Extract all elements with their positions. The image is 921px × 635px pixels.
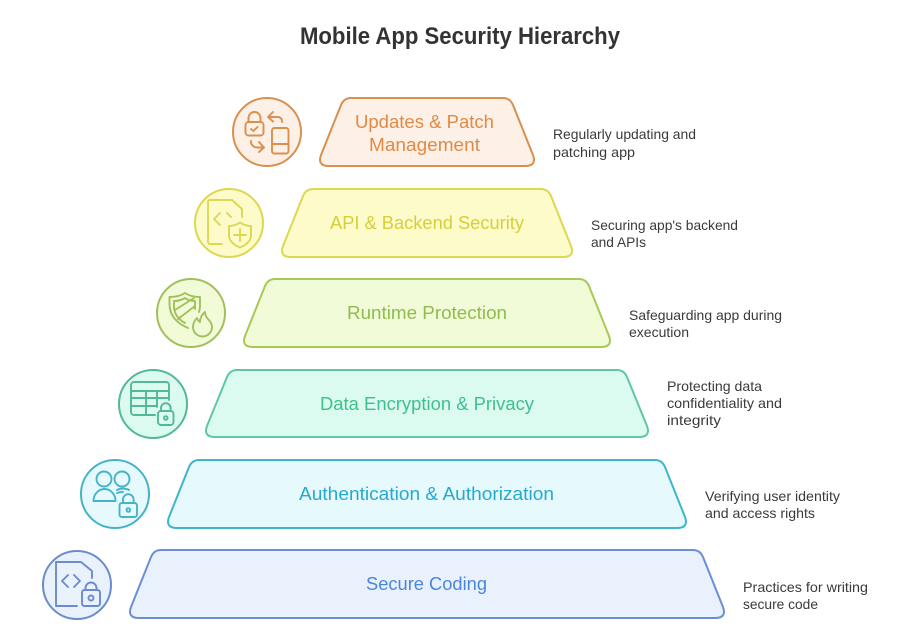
- description: data tier: confidentiality and: [667, 396, 782, 411]
- label: updates tier: [355, 112, 494, 155]
- description: authentication tier: and access rights: [705, 506, 815, 521]
- description: runtime tier: execution: [629, 325, 689, 340]
- description: secure coding tier: [743, 580, 868, 612]
- description: API tier: Securing app's backend: [591, 218, 738, 233]
- trapezoid: runtime tier: [244, 279, 610, 347]
- tier: Secure Coding: [43, 550, 868, 619]
- label: secure coding tier: Secure Coding: [366, 574, 487, 594]
- tier: Authentication & Authorization: [81, 460, 840, 528]
- description: updates tier: patching app: [553, 145, 635, 160]
- description: data tier: Protecting data: [667, 379, 762, 394]
- tier: Updates & Patch Management: [233, 98, 696, 166]
- tier: Data Encryption & Privacy: [119, 370, 782, 438]
- trapezoid: updates tier: [320, 98, 534, 166]
- label: API tier: API & Backend Security: [330, 213, 524, 233]
- description: secure coding tier: secure code: [743, 597, 818, 612]
- icon: shield with flame: [157, 279, 225, 347]
- tier: Runtime Protection: [157, 279, 782, 347]
- description: updates tier: [553, 127, 696, 160]
- description: API tier: and APIs: [591, 235, 646, 250]
- icon: code file with shield: [195, 189, 263, 257]
- trapezoid: data tier: [206, 370, 648, 437]
- description: data tier: integrity: [667, 413, 721, 428]
- icon: users with lock: [81, 460, 149, 528]
- trapezoid: authentication tier: [168, 460, 686, 528]
- trapezoid: secure coding tier: [130, 550, 724, 618]
- description: authentication tier: Verifying user identity: [705, 489, 840, 504]
- description: runtime tier: [629, 308, 782, 340]
- icon: lock, phone and sync arrows: [233, 98, 301, 166]
- description: authentication tier: [705, 489, 840, 521]
- icon: table with lock: [119, 370, 187, 438]
- label: authentication tier: Authentication & Authorization: [299, 484, 554, 504]
- icon: code file with lock: [43, 551, 111, 619]
- label: updates tier: Updates & Patch: [355, 112, 494, 132]
- tier: API & Backend Security: [195, 189, 738, 257]
- description: secure coding tier: Practices for writing: [743, 580, 868, 595]
- label: runtime tier: Runtime Protection: [347, 303, 507, 323]
- description: runtime tier: Safeguarding app during: [629, 308, 782, 323]
- trapezoid: API tier: [282, 189, 572, 257]
- label: updates tier: Management: [369, 135, 480, 155]
- description: API tier: [591, 218, 738, 250]
- description: data tier: [667, 379, 782, 428]
- label: data tier: Data Encryption & Privacy: [320, 394, 534, 414]
- title: Mobile App Security Hierarchy: [300, 23, 621, 50]
- description: updates tier: Regularly updating and: [553, 127, 696, 142]
